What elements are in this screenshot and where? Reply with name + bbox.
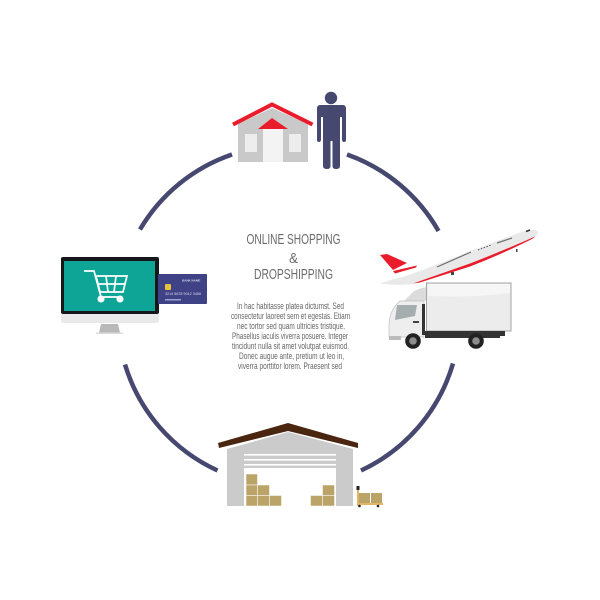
icon: shopping cart (84, 271, 127, 302)
icon: house (233, 104, 312, 162)
icon: warehouse (218, 423, 358, 506)
body text: nec tortor sed quam ultricies tristique. (237, 321, 345, 332)
title: DROPSHIPPING (254, 266, 333, 283)
icon: credit card (158, 274, 207, 304)
icon: credit card: 3214 5678 9012 3456 (165, 292, 201, 296)
body text: consectetur laoreet sem et egestas. Etiam (231, 311, 350, 322)
title: ONLINE SHOPPING (246, 231, 340, 248)
icon: airplane (380, 230, 538, 285)
icon: delivery truck (389, 283, 511, 349)
circular cycle arcs (125, 154, 453, 470)
body text: Phasellus iaculis viverra posuere. Integer (232, 331, 348, 342)
icon: person (317, 92, 346, 169)
title: & (289, 250, 298, 267)
icon: credit card: BANK NAME (182, 278, 200, 282)
body text: viverra porttitor lorem. Praesent sed (238, 361, 342, 372)
body text: In hac habitasse platea dictumst. Sed (237, 301, 344, 312)
stacked boxes (246, 474, 334, 506)
body text: Donec augue ante, pretium ut leo in, (239, 351, 344, 362)
icon: hand trolley with boxes (356, 486, 383, 507)
title (246, 231, 340, 283)
icon: computer monitor with shopping cart (61, 257, 159, 334)
body text (231, 301, 350, 372)
body text: tincidunt nulla sit amet volutpat euismod. (232, 341, 349, 352)
